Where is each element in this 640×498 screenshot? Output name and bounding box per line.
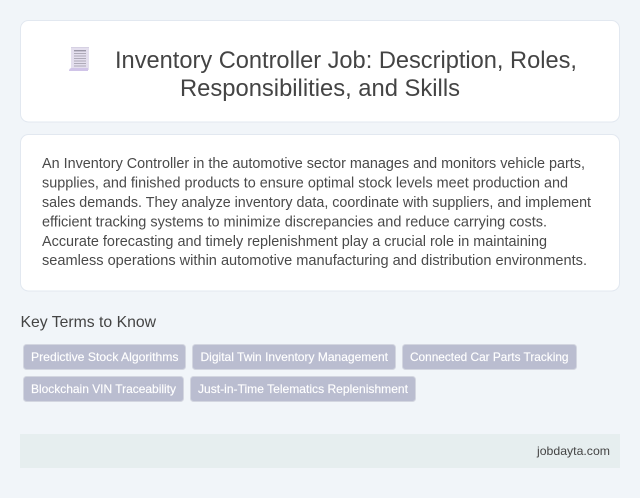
footer source text: jobdayta.com [536, 444, 610, 458]
text block: description: An Inventory Controller in the automotive sector manages and monitors vehicle parts, [42, 156, 585, 172]
text block: description: efficient tracking systems to minimize discrepancies and reduce carrying costs. [42, 214, 547, 230]
tag: Digital Twin Inventory Management [192, 344, 396, 370]
tag: Predictive Stock Algorithms: Predictive Stock Algorithms [31, 350, 178, 364]
tag: Just-in-Time Telematics Replenishment: Just-in-Time Telematics Replenishment [198, 382, 409, 396]
tag: Digital Twin Inventory Management: Digital Twin Inventory Management [200, 350, 389, 364]
panel: title card [20, 20, 620, 122]
text block: description [42, 156, 591, 269]
tag: Connected Car Parts Tracking [402, 344, 576, 370]
heading: title [115, 47, 577, 102]
text block: description: sales demands. They analyze inventory data, coordinate with suppliers, and implement [42, 195, 591, 211]
heading: title: Inventory Controller Job: Description, Roles, [115, 47, 577, 74]
tag: Blockchain VIN Traceability: Blockchain VIN Traceability [31, 382, 176, 396]
tag: Just-in-Time Telematics Replenishment [190, 376, 416, 402]
icon: document scroll [69, 47, 89, 71]
text block: description: Accurate forecasting and timely replenishment play a crucial role in maintaining [42, 234, 547, 250]
text block: description: seamless operations within automotive manufacturing and distribution environments. [42, 253, 587, 269]
panel: description card [20, 134, 620, 291]
tag: Blockchain VIN Traceability [24, 376, 184, 402]
heading: title: Responsibilities, and Skills [180, 75, 460, 102]
text block: description: supplies, and finished products to ensure optimal stock levels meet production and [42, 176, 568, 192]
tag: Connected Car Parts Tracking: Connected Car Parts Tracking [410, 350, 568, 364]
key terms tags [24, 344, 576, 402]
footer bar [20, 434, 620, 468]
heading: key terms: Key Terms to Know [20, 314, 156, 331]
tag: Predictive Stock Algorithms [24, 344, 186, 370]
